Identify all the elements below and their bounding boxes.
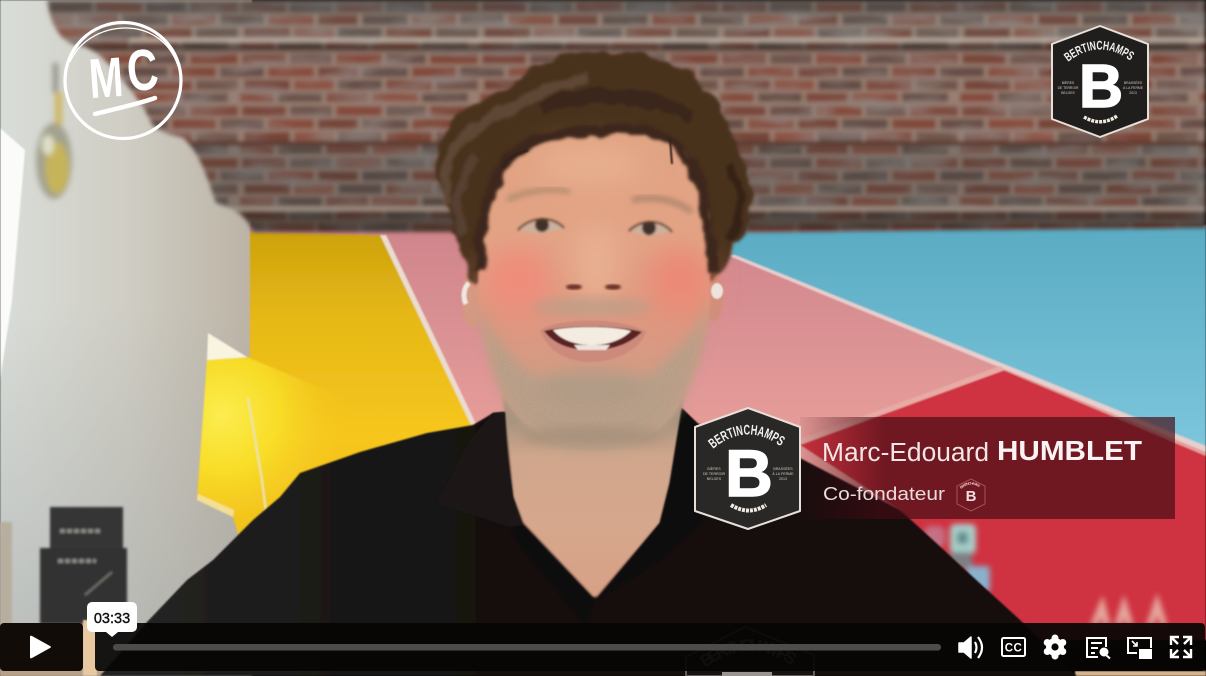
name: Marc-Edouard xyxy=(822,439,989,467)
logo: Bertinchamps badge: DE TERROIR xyxy=(703,472,725,476)
logo: Bertinchamps badge: BRASSÉES xyxy=(773,466,793,471)
background: left white wall xyxy=(0,0,252,676)
logo: MC: C xyxy=(124,37,161,104)
stubble xyxy=(480,300,708,450)
logo: Bertinchamps top right: BELGES xyxy=(1061,91,1076,95)
logo: MC xyxy=(65,22,181,138)
person: face xyxy=(478,131,710,450)
logo: Bertinchamps top right: BERTINCHAMPS xyxy=(1064,40,1134,62)
role: Co-fondateur xyxy=(823,484,945,504)
name plate panel xyxy=(800,417,1175,519)
time tooltip xyxy=(87,602,137,637)
person: hair fringe xyxy=(479,129,713,272)
logo: Bertinchamps top right: À LA FERME xyxy=(1123,86,1144,90)
person: eyebrows and eyes xyxy=(507,190,692,235)
person: nose xyxy=(566,284,621,290)
chalkboard xyxy=(0,507,127,626)
person: mouth xyxy=(540,320,646,362)
icon: volume xyxy=(959,637,982,658)
icon: settings gear xyxy=(1044,634,1066,660)
logo: Bertinchamps top right: B xyxy=(1079,52,1123,120)
person: earbuds xyxy=(464,283,723,304)
background objects on the right xyxy=(924,524,1164,625)
person: neck xyxy=(503,385,684,597)
person: ears xyxy=(462,269,723,328)
logo: Bertinchamps badge: BIÈRES xyxy=(707,466,721,471)
logo: Bertinchamps badge: À LA FERME xyxy=(772,472,794,476)
wall decoration: yellow hanging object xyxy=(36,63,72,199)
table strip xyxy=(0,620,1206,676)
face light and cheeks xyxy=(486,147,710,312)
small logo: BERTINCHAMPS xyxy=(960,482,980,489)
logo: Bertinchamps badge: BERTINCHAMPS xyxy=(708,424,785,448)
logo: Bertinchamps top right xyxy=(1051,25,1149,138)
icon: transcript search xyxy=(1087,638,1110,658)
icon: closed captions: CC xyxy=(1005,642,1022,654)
person: shirt xyxy=(100,408,1077,676)
small logo xyxy=(956,478,986,512)
logo: Bertinchamps badge xyxy=(694,407,801,530)
person: hair xyxy=(434,52,752,282)
play button xyxy=(0,623,83,671)
logo: Bertinchamps badge: BELGES xyxy=(707,477,722,481)
time tooltip: 03:33 xyxy=(94,611,130,627)
small logo: B xyxy=(966,488,977,505)
logo: MC: M xyxy=(87,45,125,110)
person: collar xyxy=(437,408,705,625)
stubble texture xyxy=(480,300,708,450)
logo: Bertinchamps top right: DE TERROIR xyxy=(1058,86,1079,90)
progress bar xyxy=(95,623,1205,671)
background: brick ceiling xyxy=(40,0,1206,240)
icon: fullscreen xyxy=(1171,637,1191,657)
faint logo on shirt: BERTINCHAMPS xyxy=(700,640,796,666)
background: colored mural wall xyxy=(197,225,1206,640)
icon: closed captions xyxy=(1002,638,1025,656)
logo: Bertinchamps top right: BRASSÉES xyxy=(1124,80,1143,85)
faint logo on shirt xyxy=(685,640,815,676)
person: hair strands on forehead xyxy=(503,138,672,168)
logo: Bertinchamps badge: B xyxy=(725,436,773,510)
name plate panel: HUMBLET xyxy=(997,435,1142,466)
video controls bar xyxy=(0,602,1205,671)
icon: picture in picture xyxy=(1128,638,1152,659)
logo: Bertinchamps top right: 2013 xyxy=(1129,91,1137,95)
logo: Bertinchamps top right: BIÈRES xyxy=(1062,80,1075,85)
logo: Bertinchamps badge: 2013 xyxy=(779,477,787,481)
